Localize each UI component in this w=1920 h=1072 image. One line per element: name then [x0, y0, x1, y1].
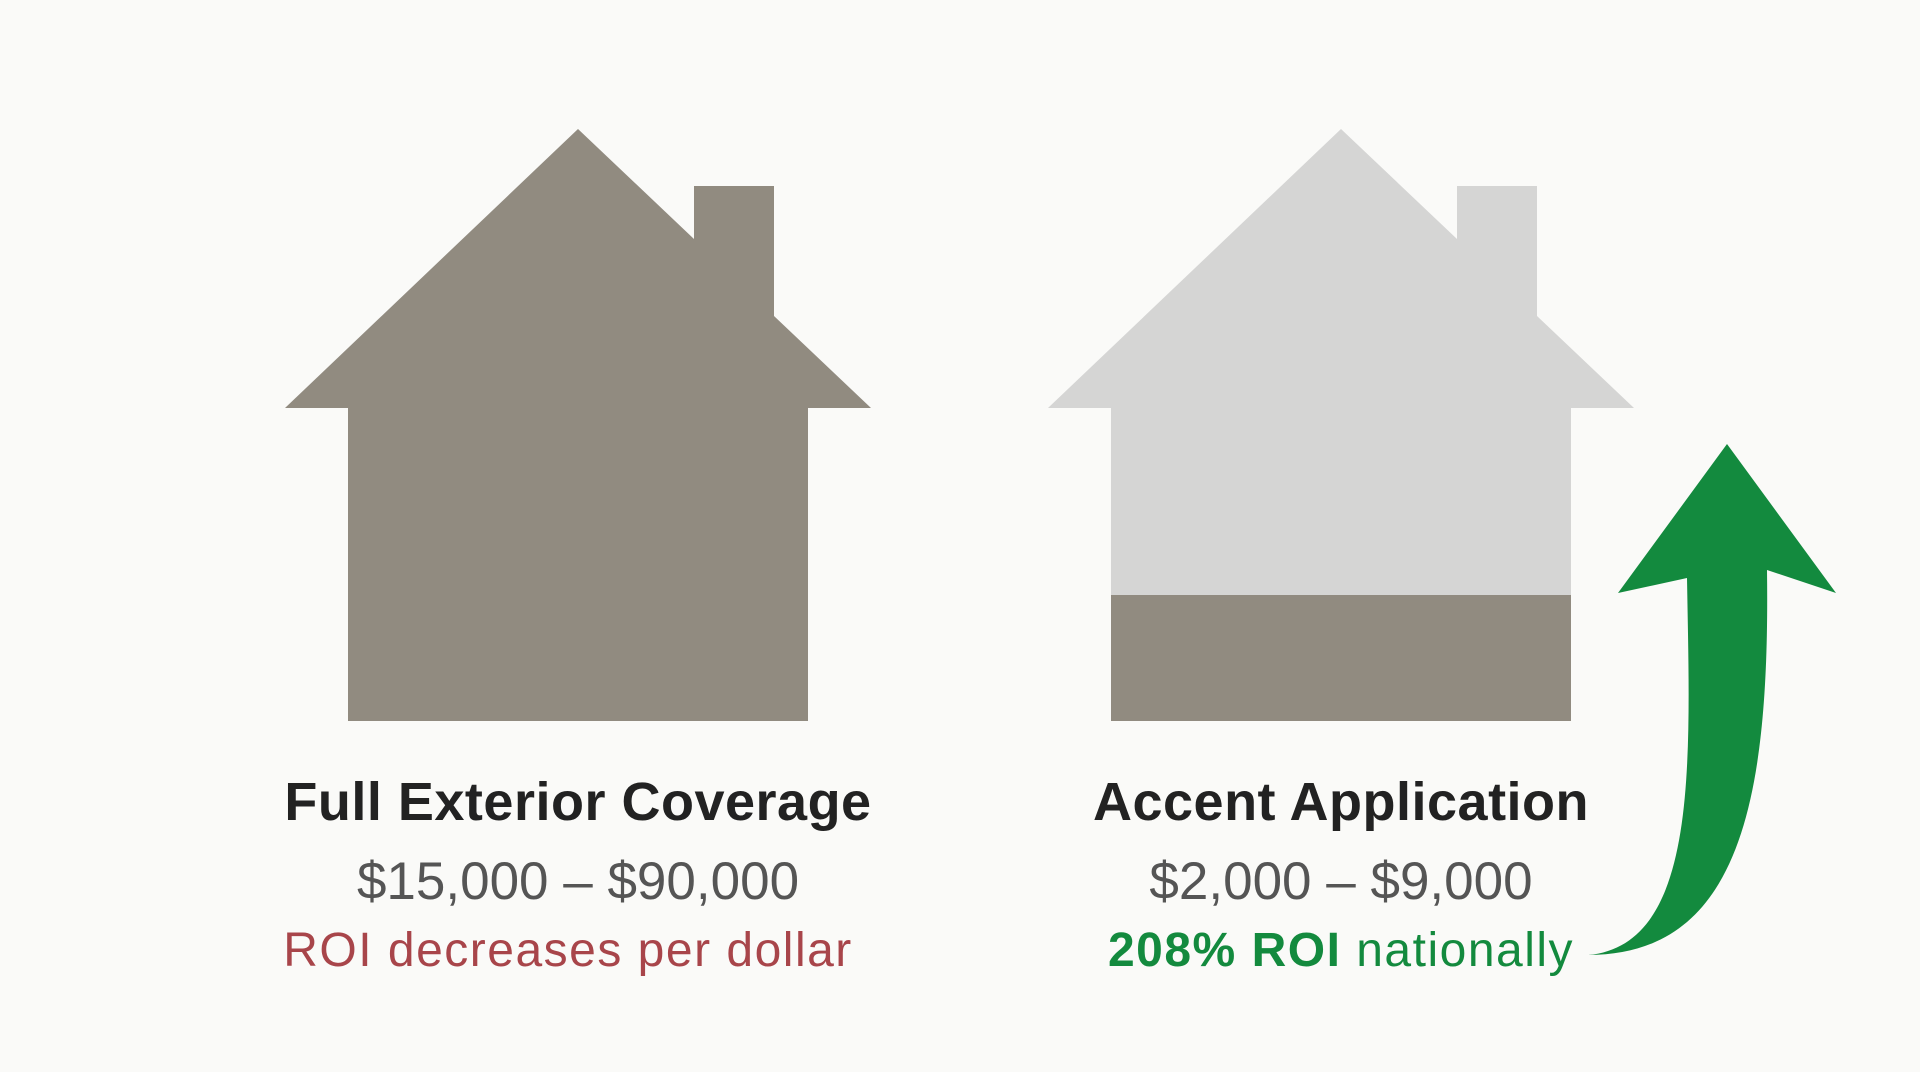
note: roi decreases: ROI decreases per dollar	[283, 924, 853, 977]
arrow: upward green	[1588, 444, 1836, 955]
note: 208% roi: 208% ROI nationally	[1108, 924, 1574, 977]
price: accent: $2,000 – $9,000	[1149, 852, 1533, 911]
house: accent application	[1048, 129, 1634, 721]
price: full exterior: $15,000 – $90,000	[357, 852, 799, 911]
heading: accent application: Accent Application	[1093, 772, 1589, 832]
heading: full exterior coverage: Full Exterior Coverage	[284, 772, 872, 832]
house: full exterior coverage	[285, 129, 871, 721]
